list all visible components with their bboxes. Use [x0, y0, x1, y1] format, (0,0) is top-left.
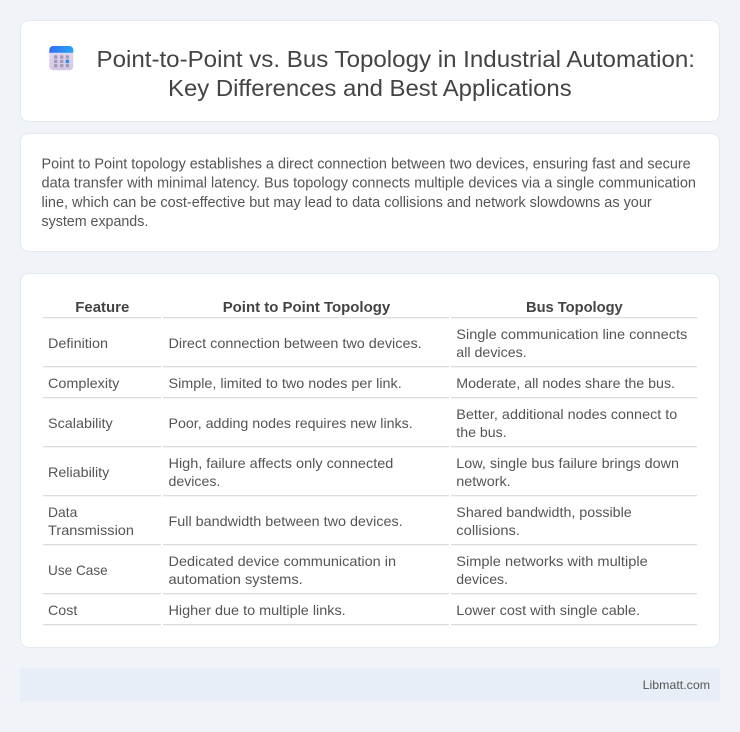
table row: Use Case: Use Case — [48, 562, 108, 578]
table row: Use Case: Simple networks with multiple — [456, 553, 648, 569]
table row: Cost — [43, 602, 697, 625]
table row: Complexity: Complexity — [48, 375, 119, 391]
table row: Data Transmission: collisions. — [456, 522, 520, 538]
footer credit: Libmatt.com — [643, 678, 710, 692]
icon: calendar — [49, 46, 73, 70]
panel: title card — [20, 20, 720, 122]
table row: Complexity — [43, 375, 697, 398]
text block: introduction paragraph: line, which can be cost-effective but may lead to data collisions and network slowdowns as your — [42, 195, 652, 211]
table row: Reliability: devices. — [168, 473, 220, 489]
footer bar — [20, 668, 720, 702]
table row: Use Case: Dedicated device communication in — [168, 553, 396, 569]
table row: Use Case: devices. — [456, 571, 508, 587]
text block: introduction paragraph: system expands. — [42, 214, 148, 230]
panel: introduction — [20, 134, 720, 252]
table row: Data Transmission — [43, 504, 697, 545]
table row: Scalability: Better, additional nodes connect to — [456, 406, 678, 422]
table row: Data Transmission: Shared bandwidth, possible — [456, 504, 632, 520]
table row: Data Transmission: Transmission — [48, 522, 134, 538]
table row: Scalability: the bus. — [456, 424, 507, 440]
table header row — [43, 299, 697, 318]
table header row: Feature — [75, 299, 129, 316]
table row: Reliability: network. — [456, 473, 511, 489]
table row: Cost: Cost — [48, 602, 77, 618]
table header row: Point to Point Topology — [223, 299, 391, 316]
table row: Scalability — [43, 406, 697, 447]
table row: Reliability: Low, single bus failure brings down — [456, 455, 679, 471]
table row: Reliability: High, failure affects only connected — [168, 455, 393, 471]
table header row: Bus Topology — [526, 299, 623, 316]
panel: comparison table — [20, 274, 720, 648]
table row: Cost: Lower cost with single cable. — [456, 602, 640, 618]
title: Key Differences and Best Applications — [168, 75, 572, 101]
table row: Use Case — [43, 553, 697, 594]
table row: Complexity: Simple, limited to two nodes per link. — [168, 375, 402, 391]
text block: introduction paragraph: data transfer with minimal latency. Bus topology connects multiple devices via a single communication — [42, 175, 696, 191]
table row: Complexity: Moderate, all nodes share the bus. — [456, 375, 675, 391]
table row: Reliability — [43, 455, 697, 496]
table row: Scalability: Poor, adding nodes requires new links. — [168, 415, 413, 431]
table row: Definition — [43, 326, 697, 367]
text block: introduction paragraph: Point to Point topology establishes a direct connection between two devices, ensuring fast and secure — [42, 156, 691, 172]
title: Point-to-Point vs. Bus Topology in Industrial Automation: — [96, 46, 695, 72]
table row: Reliability: Reliability — [48, 464, 109, 480]
text block: introduction paragraph — [42, 156, 696, 230]
table row: Definition: Direct connection between two devices. — [168, 335, 422, 351]
table row: Data Transmission: Data — [48, 504, 78, 520]
table row: Definition: Single communication line connects — [456, 326, 687, 342]
title — [96, 46, 695, 101]
table row: Scalability: Scalability — [48, 415, 113, 431]
table row: Definition: all devices. — [456, 344, 527, 360]
table row: Cost: Higher due to multiple links. — [168, 602, 346, 618]
table row: Use Case: automation systems. — [168, 571, 303, 587]
table row: Definition: Definition — [48, 335, 108, 351]
table row: Data Transmission: Full bandwidth between two devices. — [168, 513, 403, 529]
